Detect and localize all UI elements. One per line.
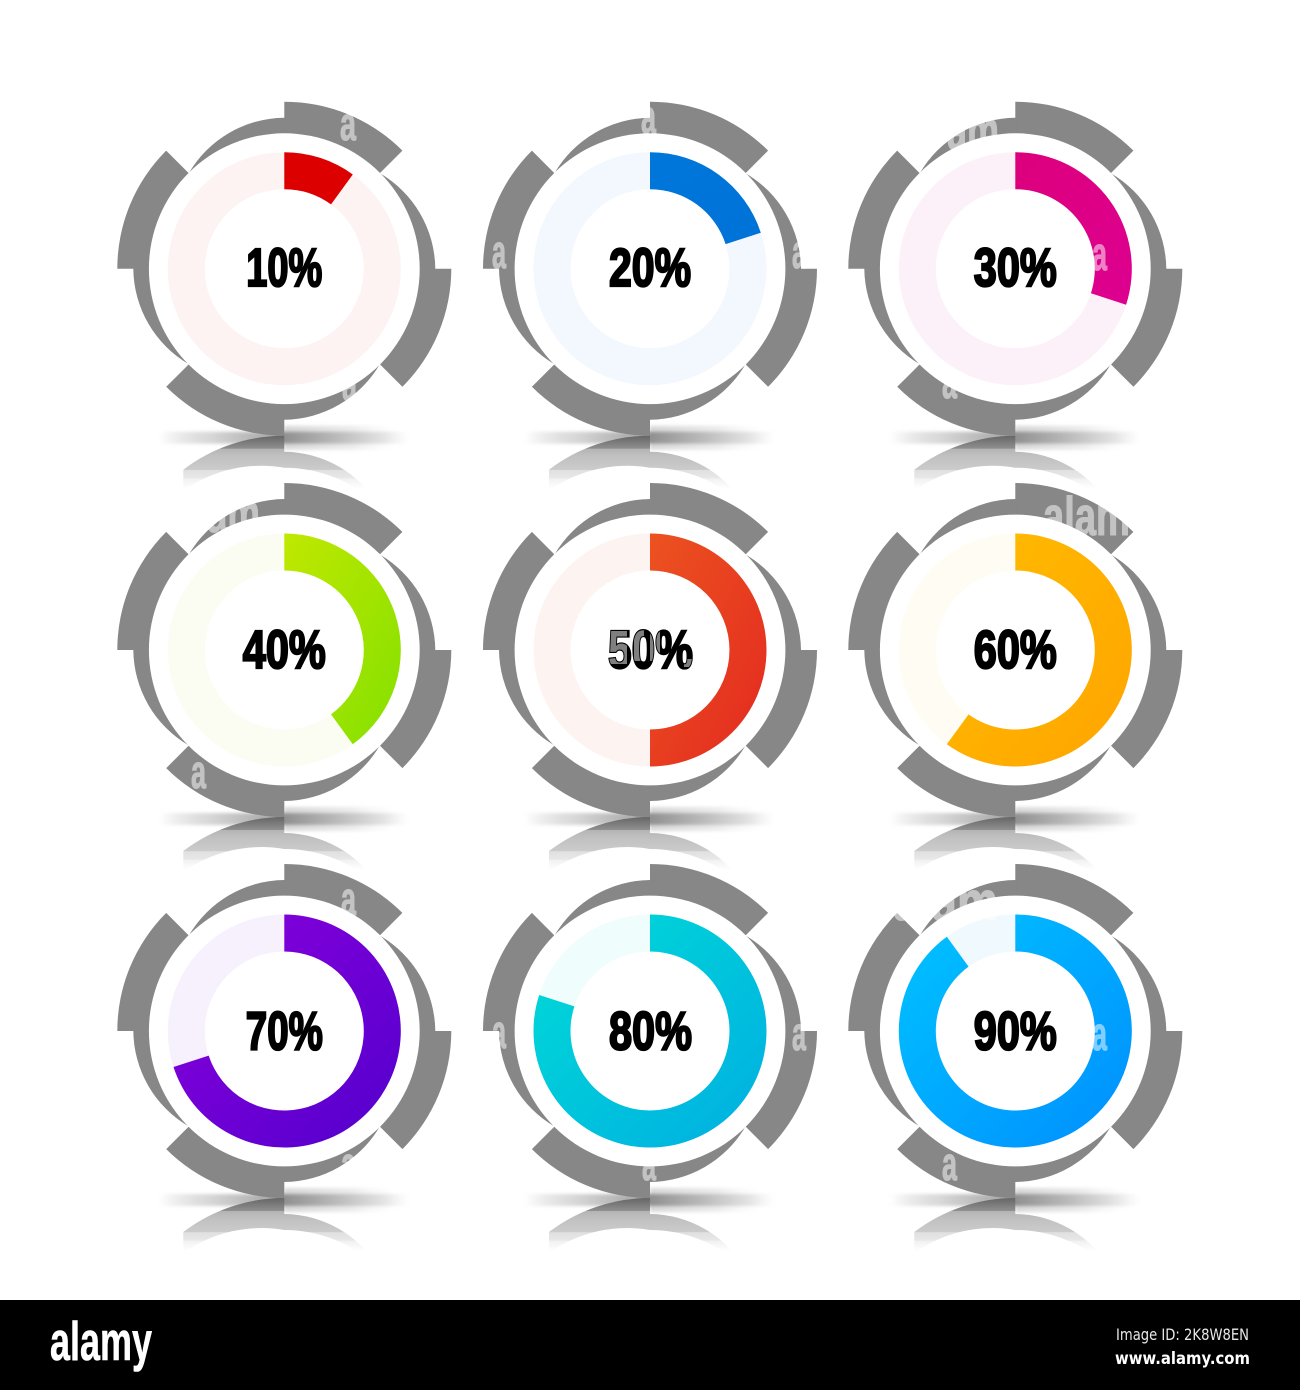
ring track <box>186 552 382 748</box>
floor shadow and reflection <box>159 1188 409 1270</box>
ring track <box>552 933 748 1129</box>
ring track <box>552 552 748 748</box>
grey segmented ring <box>848 483 1182 817</box>
gauge: 20% <box>483 102 817 507</box>
floor shadow and reflection <box>890 1188 1140 1270</box>
watermark overlay letters: alam <box>893 870 998 932</box>
progress arc 30% <box>1015 152 1132 305</box>
grey segmented ring <box>848 864 1182 1198</box>
footer logo: alamy <box>50 1310 152 1372</box>
footer bar <box>0 1300 1300 1390</box>
ring track <box>186 933 382 1129</box>
grey segmented ring <box>117 864 451 1198</box>
grey segmented ring <box>117 102 451 436</box>
floor shadow and reflection <box>525 807 775 888</box>
grey segmented ring <box>483 102 817 436</box>
watermark overlay letters: am <box>207 482 260 544</box>
site url: www.alamy.com <box>1115 1349 1250 1369</box>
watermark grey patches over 50% label <box>609 630 692 667</box>
ring track <box>186 171 382 367</box>
progress arc 10% <box>284 152 353 204</box>
watermark overlay letters: a <box>942 355 957 408</box>
watermark overlay letters: a <box>492 1005 506 1058</box>
watermark overlay letters: a <box>1092 227 1107 280</box>
ring track <box>917 552 1113 748</box>
gauge: 70% <box>117 864 451 1270</box>
progress arc 20% <box>650 152 761 244</box>
watermark overlay letters: a <box>641 90 656 143</box>
progress arc 40% <box>284 534 401 744</box>
watermark overlay letters: a <box>191 745 206 798</box>
value label: 10% <box>246 238 322 298</box>
ring track <box>917 171 1113 367</box>
value label: 60% <box>974 620 1057 680</box>
value label: 90% <box>974 1002 1057 1062</box>
progress arc 60% <box>947 534 1132 766</box>
watermark overlay letters: a <box>792 1007 806 1060</box>
watermark overlay letters: a <box>492 225 506 278</box>
watermark overlay letters: a <box>341 872 356 925</box>
grey segmented ring <box>483 864 817 1198</box>
value label: 30% <box>974 238 1057 298</box>
gauge: 50% <box>483 483 817 888</box>
progress arc 90% <box>899 914 1132 1148</box>
watermark overlay letters: a <box>341 1137 356 1190</box>
gauge: 90% <box>848 864 1182 1270</box>
watermark overlay letters: a <box>342 357 357 410</box>
watermark overlay letters <box>191 90 1130 1190</box>
floor shadow and reflection <box>525 426 775 507</box>
grey segmented ring <box>117 483 451 817</box>
floor shadow and reflection <box>890 426 1140 507</box>
grey segmented ring <box>483 483 817 817</box>
gauge: 60% <box>848 483 1182 888</box>
value label: 20% <box>609 238 691 298</box>
watermark overlay letters: am <box>947 99 999 161</box>
gauge: 80% <box>483 864 817 1270</box>
watermark overlay letters: a <box>942 1137 957 1190</box>
value label: 50% <box>608 620 693 680</box>
progress arc 80% <box>533 914 766 1148</box>
watermark overlay letters: a <box>642 1137 656 1190</box>
value label: 80% <box>609 1002 692 1062</box>
value label: 40% <box>243 620 326 680</box>
watermark overlay letters: a <box>1092 1007 1107 1060</box>
gauge: 40% <box>117 483 451 888</box>
watermark overlay letters: a <box>340 97 357 150</box>
ring track <box>917 933 1113 1129</box>
watermark overlay letters: alam <box>1043 485 1130 547</box>
watermark overlay letters: a <box>792 225 806 278</box>
floor shadow and reflection <box>525 1188 775 1270</box>
floor shadow and reflection <box>159 426 409 507</box>
ring track <box>552 171 748 367</box>
progress arc 50% <box>650 534 766 766</box>
image id: Image ID: 2K8W8EN <box>1116 1325 1249 1344</box>
gauge: 10% <box>117 102 451 507</box>
grey segmented ring <box>848 102 1182 436</box>
floor shadow and reflection <box>890 807 1140 888</box>
value label: 70% <box>246 1002 323 1062</box>
floor shadow and reflection <box>159 807 409 888</box>
gauge: 30% <box>848 102 1182 507</box>
progress arc 70% <box>173 914 401 1148</box>
